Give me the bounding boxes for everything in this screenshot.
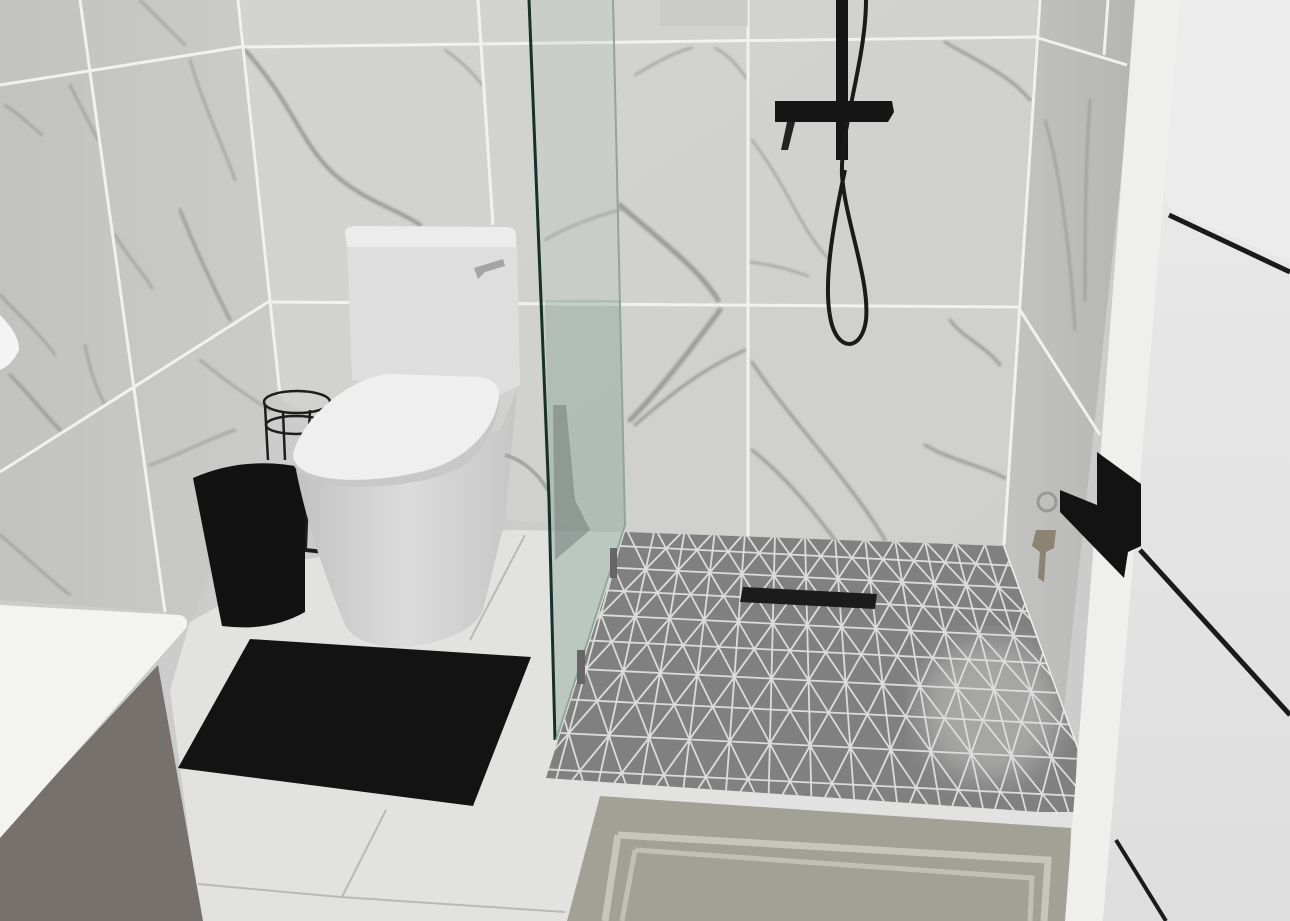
mat border	[605, 835, 1048, 921]
riser pipe	[836, 0, 848, 160]
bowl	[296, 390, 517, 648]
beige bath mat	[567, 796, 1071, 921]
glass dark edge	[529, 0, 555, 740]
toilet brush seen through glass	[553, 405, 590, 560]
hose	[828, 0, 866, 344]
left wall	[0, 0, 282, 625]
floor grout lines	[198, 535, 565, 912]
back wall	[240, 0, 1040, 545]
marble veins	[0, 0, 1090, 595]
glass pane	[529, 0, 625, 740]
shower mixer and hose	[775, 0, 894, 344]
toilet brush holder	[264, 391, 330, 552]
mosaic shading	[920, 640, 1060, 780]
door key	[1032, 493, 1056, 582]
mixer bar	[775, 101, 894, 122]
shower shelf	[660, 0, 748, 26]
door panel groove	[1169, 215, 1290, 272]
toilet	[293, 226, 520, 648]
glass shower screen	[529, 0, 625, 740]
mixer lever	[781, 122, 795, 150]
door	[1103, 0, 1290, 921]
glass clamp	[610, 548, 617, 578]
shower drain	[740, 587, 877, 609]
seat	[293, 400, 500, 487]
mosaic grout	[548, 532, 1077, 812]
seat lid	[293, 374, 499, 480]
door panel top	[1165, 0, 1290, 262]
vanity countertop	[0, 605, 187, 838]
right wall	[1003, 0, 1140, 745]
door frame	[1065, 0, 1180, 921]
shower floor mosaic	[546, 532, 1077, 812]
supply hose	[505, 455, 548, 490]
waste bin	[193, 463, 305, 627]
mat inner border	[622, 850, 1032, 921]
glass far edge	[556, 0, 625, 740]
vanity unit	[0, 605, 203, 921]
door panel groove lower	[1116, 840, 1166, 921]
cistern	[347, 245, 520, 395]
main floor	[170, 530, 1075, 921]
glass lower clamp	[577, 650, 585, 684]
door handle	[1060, 452, 1141, 578]
cistern lid	[345, 226, 516, 247]
black bath mat	[178, 639, 531, 806]
flush lever	[474, 259, 505, 279]
glass inner band	[545, 300, 625, 740]
tile grout lines	[0, 0, 1127, 748]
door panel groove middle	[1140, 550, 1290, 715]
wall fixture	[0, 315, 19, 370]
vanity cabinet	[0, 665, 203, 921]
